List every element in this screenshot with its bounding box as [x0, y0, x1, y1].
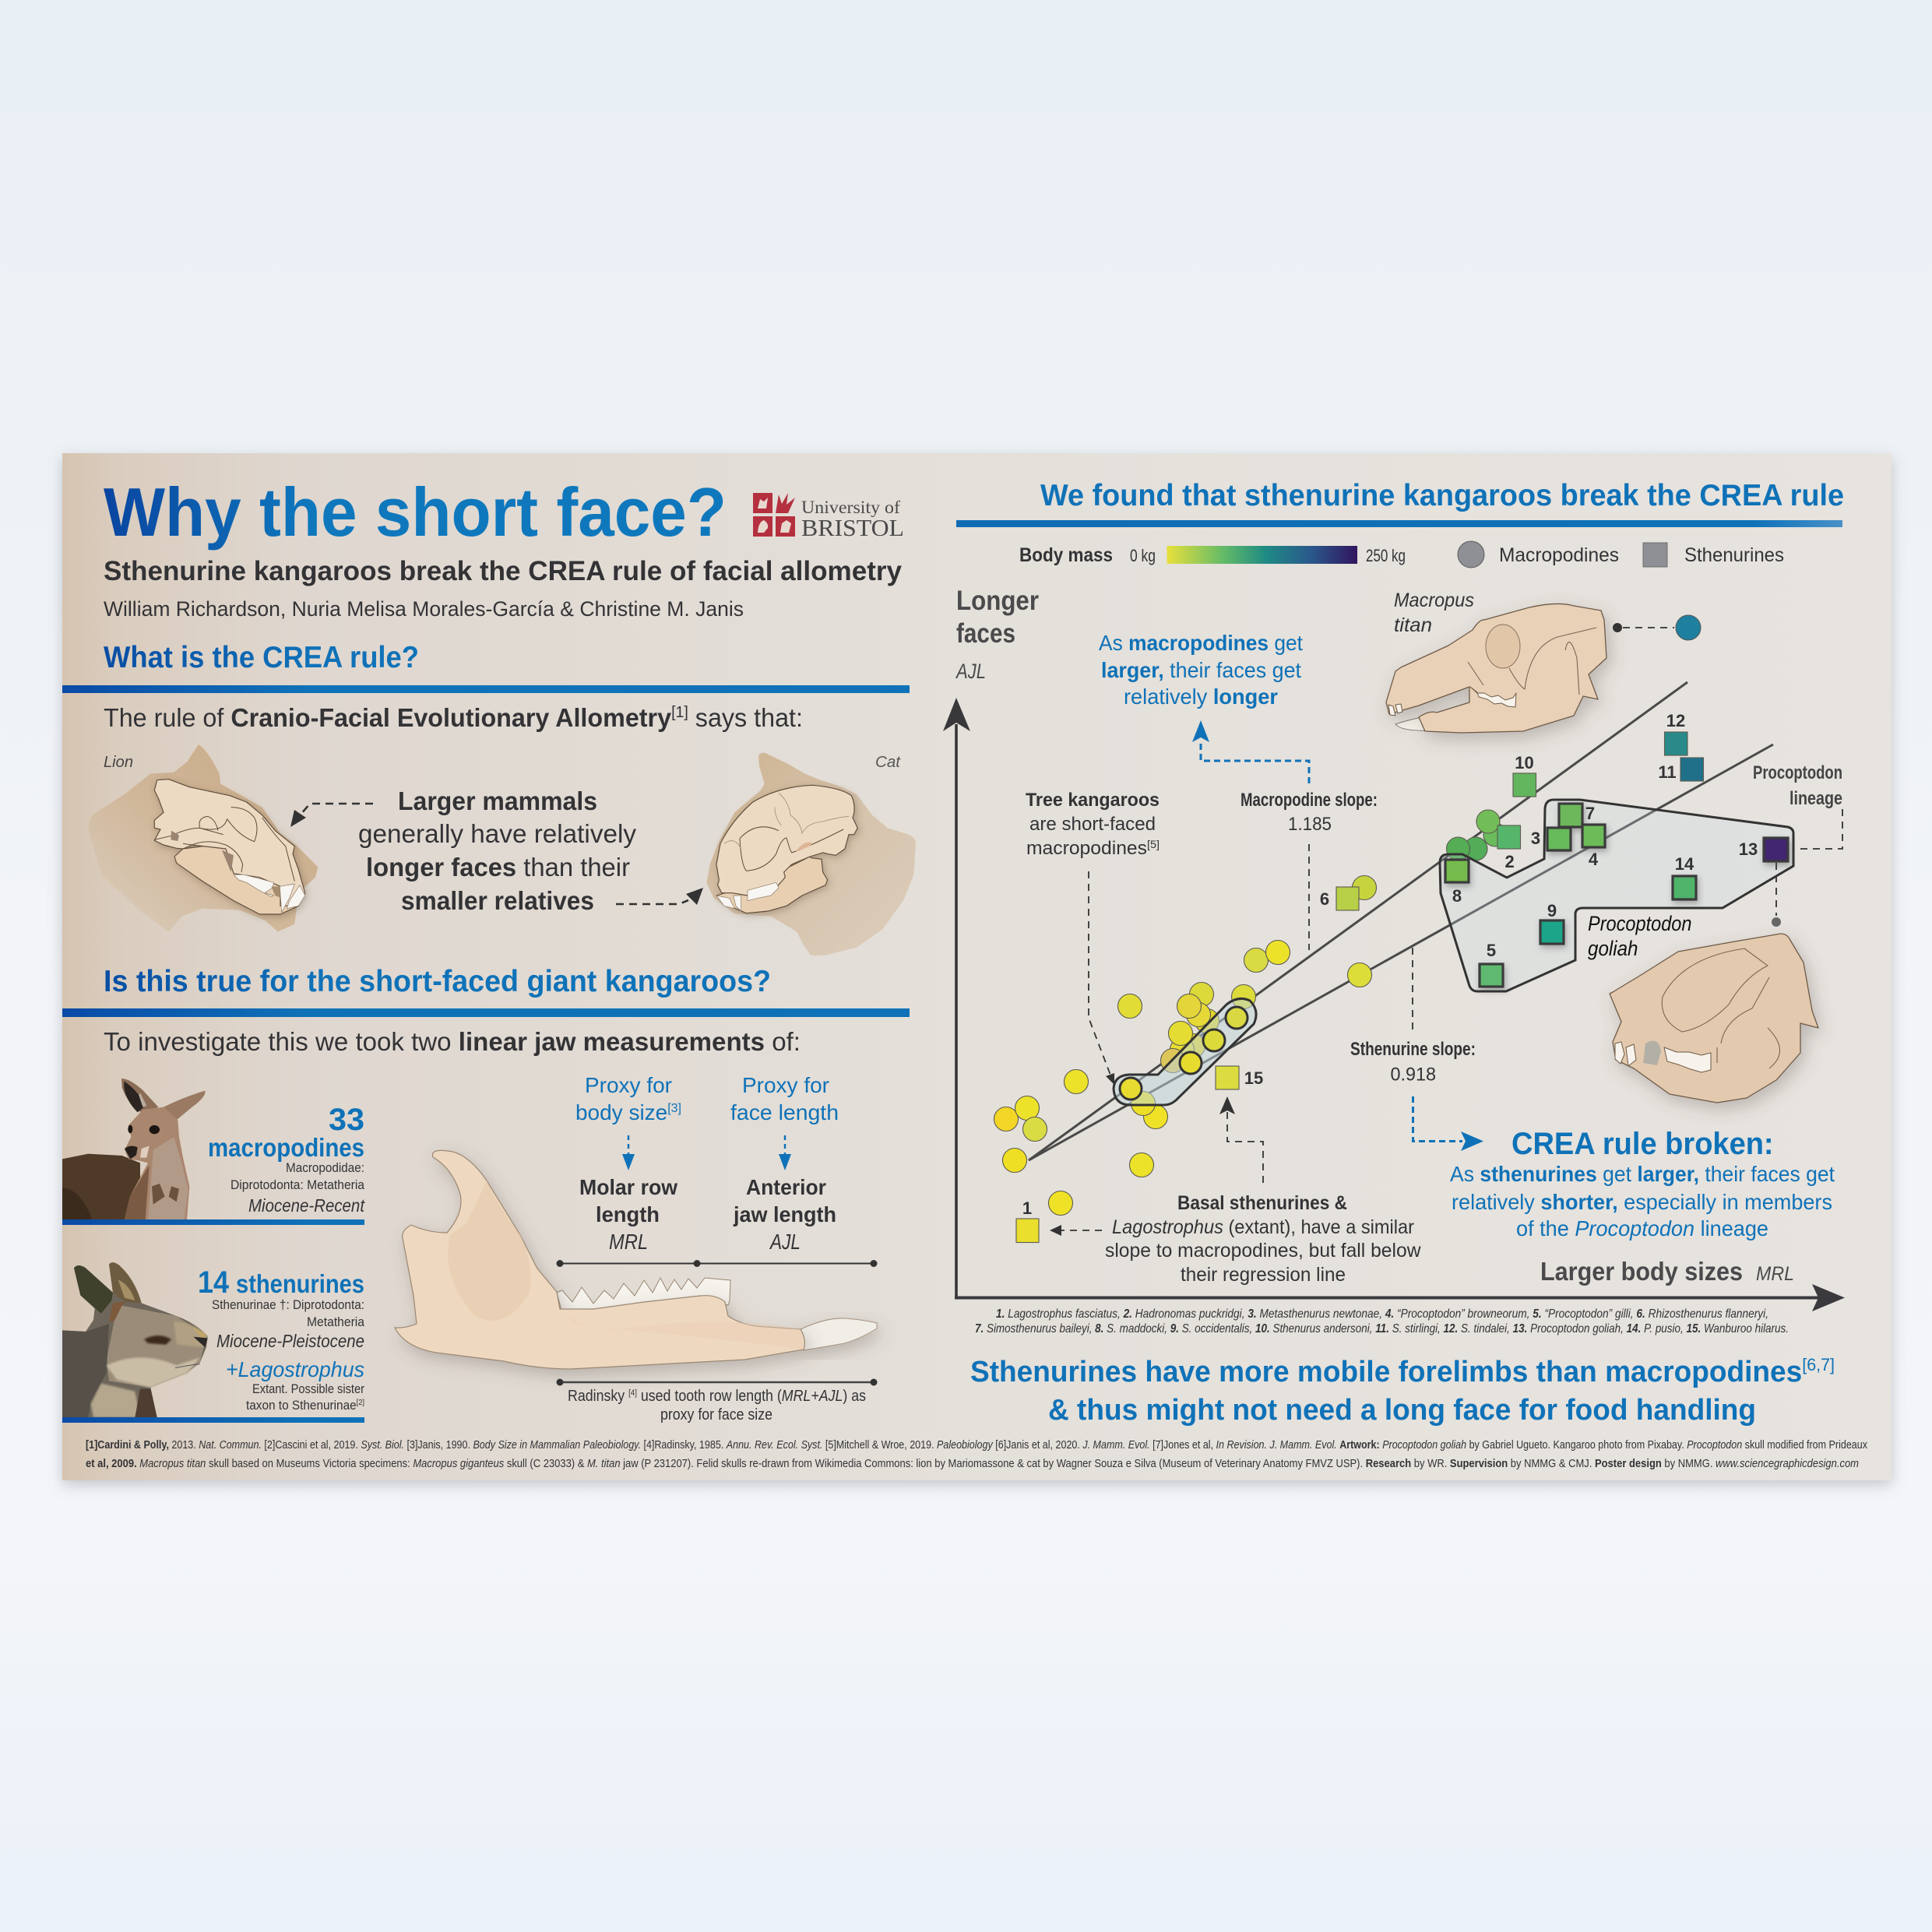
blue arrow up from macropodine slope: [1192, 720, 1309, 783]
regression line: sthenurines: [1029, 744, 1773, 1160]
data point numbers: 10: [1515, 753, 1534, 772]
Radinsky note: proxy for face size: [660, 1406, 772, 1423]
data point numbers: 1: [1022, 1198, 1032, 1218]
Procoptodon goliah label: [1588, 912, 1691, 960]
CREA rule broken statement: CREA rule broken:: [1511, 1127, 1774, 1161]
y axis arrow: [943, 698, 970, 1299]
CREA rule broken statement: [1450, 1127, 1835, 1240]
data point numbers: 2: [1504, 852, 1515, 871]
Radinsky note: Radinsky: [568, 1388, 632, 1405]
Sthenurine slope label: [1350, 948, 1476, 1086]
data point numbers: 5: [1487, 941, 1496, 960]
references and credits: [86, 1439, 1868, 1470]
blue arrow to CREA rule broken: [1413, 1096, 1483, 1151]
connector: Macropus titan point: [1613, 615, 1701, 640]
conclusion statement: & thus might not need a long face for food handling: [1048, 1394, 1756, 1427]
macropodine trend statement: [1099, 631, 1303, 709]
sthenurine stats: [2]: [357, 1399, 364, 1407]
sthenurine data points: [1016, 732, 1788, 1243]
proxy column: AJL: AJL: [769, 1230, 801, 1254]
x axis arrow: [955, 1284, 1845, 1311]
Macropodine slope label: [1240, 790, 1378, 950]
section bar: [62, 685, 910, 693]
data point numbers: 14: [1675, 854, 1694, 874]
Tree kangaroos note: macropodines: [1026, 838, 1144, 859]
proxy column: AJL: Anterior: [746, 1175, 826, 1199]
data point numbers: 11: [1658, 762, 1677, 782]
proxy column: MRL: body size: [575, 1100, 667, 1124]
sthenurine stats: sthenurines: [236, 1269, 364, 1298]
references and credits: et al, 2009. Macropus titan skull based on Museums Victoria specimens: Macropus giganteus skull (C 23033) & M. titan jaw (P 231207). Felid skulls re-drawn from Wikimedia Commons: lion by Mariomassone & cat by Wagner Souza e Silva (Museum of Veterinary Anatomy FMVZ USP). Research by WR. Supervision by NMMG & CMJ. Poster design by NMMG. www.sciencegraphicdesign.com: [86, 1458, 1859, 1470]
species key: [975, 1307, 1789, 1336]
x axis label: Larger body sizes: [1540, 1257, 1743, 1286]
logo: University of Bristol: BRISTOL: [801, 514, 904, 541]
sthenurine lineage outline: [1440, 800, 1793, 991]
Procoptodon goliah label: Procoptodon: [1588, 912, 1691, 935]
proxy column: MRL: length: [596, 1202, 660, 1226]
y axis label: Longer: [956, 586, 1039, 616]
logo: University of Bristol: [753, 493, 904, 541]
sthenurine kangaroo picture: [62, 1262, 208, 1417]
macropodine data points: [994, 810, 1507, 1215]
cat label: Cat: [875, 754, 901, 771]
poster background panel: [62, 453, 1892, 1480]
regression line: macropodines: [1029, 682, 1687, 1160]
Tree kangaroos note: [1026, 790, 1160, 859]
conclusion statement: Sthenurines have more mobile forelimbs than macropodines: [970, 1356, 1824, 1388]
sthenurine stats: Miocene-Pleistocene: [216, 1331, 364, 1351]
macropodine trend statement: larger, their faces get: [1101, 658, 1301, 682]
illustration: lion head and skull: [88, 744, 318, 932]
arrow to point 1: [1050, 1225, 1102, 1236]
macropodine stats: Miocene-Recent: [248, 1195, 365, 1216]
references and credits: [1]Cardini & Polly, 2013. Nat. Commun. [2]Cascini et al, 2019. Syst. Biol. [3]Janis, 1990. Body Size in Mammalian Paleobiology. [4]Radinsky, 1985. Annu. Rev. Ecol. Syst. [5]Mitchell & Wroe, 2019. Paleobiology [6]Janis et al, 2020. J. Mamm. Evol. [7]Jones et al, In Revision. J. Mamm. Evol. Artwork: Procoptodon goliah by Gabriel Ugueto. Kangaroo photo from Pixabay. Procoptodon skull modified from Prideaux: [86, 1439, 1868, 1452]
proxy column: AJL: [730, 1073, 839, 1254]
arrow to tree kangaroos: [1089, 871, 1114, 1085]
section bar: [62, 1008, 910, 1017]
right heading: We found that sthenurine kangaroos break the CREA rule: [1040, 479, 1844, 512]
macropodine stats: 33: [329, 1103, 364, 1137]
title: Why the short face?: [104, 473, 727, 551]
Macropus titan skull: Macropus: [1394, 589, 1474, 611]
y axis label: [955, 586, 1039, 683]
measure line: MRL and AJL: [556, 1260, 877, 1267]
proxy column: MRL: Proxy for: [585, 1073, 672, 1097]
macropodine trend statement: As macropodines get: [1099, 631, 1303, 655]
CREA rule broken statement: As sthenurines get larger, their faces get: [1450, 1162, 1835, 1186]
Procoptodon lineage label: Procoptodon: [1753, 762, 1842, 783]
illustration: cat head and skull: [706, 753, 916, 955]
data point numbers: [1022, 711, 1758, 1218]
data point numbers: 4: [1589, 850, 1599, 869]
conclusion statement: [970, 1355, 1835, 1427]
legend: Body mass: [1019, 544, 1113, 566]
Procoptodon lineage label: lineage: [1789, 788, 1842, 809]
macropodine stats: Macropodidae:: [286, 1161, 364, 1175]
sthenurine stats: Sthenurinae †: Diprotodonta:: [212, 1298, 364, 1312]
Procoptodon goliah label: goliah: [1588, 937, 1638, 960]
macropodine underline: [62, 1219, 364, 1225]
Macropus titan skull: titan: [1394, 614, 1432, 636]
macropodine kangaroo picture: [62, 1079, 205, 1219]
data point numbers: 3: [1531, 829, 1540, 848]
central text: larger mammals: [358, 787, 636, 915]
central text: larger mammals: longer faces than their: [366, 853, 630, 882]
Macropodine slope label: Macropodine slope:: [1240, 790, 1378, 811]
proxy column: AJL: jaw length: [733, 1202, 836, 1226]
Procoptodon lineage label: [1753, 762, 1842, 849]
basal sthenurines note: their regression line: [1181, 1264, 1346, 1286]
Tree kangaroos note: Tree kangaroos: [1026, 790, 1160, 811]
sthenurine stats: Metatheria: [307, 1315, 365, 1329]
tree kangaroo data points: [1120, 1007, 1248, 1100]
proxy column: AJL: face length: [730, 1100, 839, 1124]
macropodine stats: macropodines: [208, 1133, 364, 1162]
legend: [1019, 541, 1784, 568]
data point numbers: 15: [1244, 1068, 1263, 1088]
CREA rule broken statement: of the Procoptodon lineage: [1516, 1216, 1768, 1240]
Macropus titan skull: [1386, 589, 1606, 733]
y axis label: AJL: [955, 660, 986, 683]
data point numbers: 13: [1739, 839, 1758, 859]
Tree kangaroos note: are short-faced: [1029, 814, 1156, 835]
investigate sentence: To investigate this we took two linear jaw measurements of:: [104, 1027, 801, 1056]
rule sentence: The rule of Cranio-Facial Evolutionary Allometry: [104, 703, 681, 732]
species key: 1. Lagostrophus fasciatus, 2. Hadronomas puckridgi, 3. Metasthenurus newtonae, 4. “Procoptodon” browneorum, 5. “Procoptodon” gilli, 6. Rhizosthenurus flanneryi,: [996, 1307, 1768, 1321]
basal sthenurines note: [1105, 1192, 1421, 1286]
proxy column: MRL: MRL: [609, 1230, 648, 1254]
Macropodine slope label: 1.185: [1288, 814, 1332, 835]
Radinsky note: used tooth row length (: [637, 1388, 782, 1405]
Tree kangaroos note: [5]: [1147, 838, 1160, 850]
legend: 0 kg: [1130, 546, 1156, 565]
sthenurine stats: Extant. Possible sister: [252, 1382, 364, 1396]
rule sentence: [1]: [671, 704, 688, 721]
proxy column: MRL: Molar row: [579, 1175, 677, 1199]
heading: what is the CREA rule: What is the CREA rule?: [104, 641, 419, 674]
legend: 250 kg: [1366, 546, 1406, 565]
data point numbers: 6: [1320, 889, 1329, 909]
subtitle: Sthenurine kangaroos break the CREA rule of facial allometry: [104, 556, 903, 586]
data point numbers: 9: [1547, 901, 1557, 920]
species key: 7. Simosthenurus baileyi, 8. S. maddocki, 9. S. occidentalis, 10. Sthenurus andersoni, 11. S. stirlingi, 12. S. tindalei, 13. Procoptodon goliah, 14. P. pusio, 15. Wanburoo hilarus.: [975, 1322, 1789, 1336]
basal sthenurines note: Basal sthenurines &: [1177, 1192, 1347, 1214]
sthenurine stats: taxon to Sthenurinae: [246, 1399, 364, 1413]
basal sthenurines note: Lagostrophus (extant), have a similar: [1112, 1216, 1414, 1238]
central text: larger mammals: generally have relatively: [358, 819, 636, 848]
macropodine stats: [208, 1103, 365, 1216]
sthenurine stats: +Lagostrophus: [226, 1357, 364, 1381]
proxy column: MRL: [575, 1073, 681, 1254]
basal sthenurines note: slope to macropodines, but fall below: [1105, 1240, 1421, 1262]
proxy column: AJL: Proxy for: [742, 1073, 829, 1097]
arrow to point 15: [1219, 1096, 1263, 1183]
Sthenurine slope label: Sthenurine slope:: [1350, 1039, 1476, 1060]
arrow to lion: [290, 804, 373, 827]
rule sentence: says that:: [688, 703, 803, 732]
authors: William Richardson, Nuria Melisa Morales-García & Christine M. Janis: [104, 597, 744, 621]
x axis label: MRL: [1756, 1263, 1794, 1285]
Sthenurine slope label: 0.918: [1391, 1064, 1436, 1086]
section bar: [956, 520, 1842, 527]
macropodine stats: Diprotodonta: Metatheria: [231, 1178, 365, 1192]
sthenurine stats: 14: [198, 1265, 230, 1300]
central text: larger mammals: Larger mammals: [398, 787, 597, 815]
legend: Macropodines: [1499, 544, 1619, 566]
logo: University of Bristol: University of: [801, 498, 900, 517]
legend: Sthenurines: [1684, 544, 1784, 566]
sthenurine stats: [198, 1265, 365, 1413]
Radinsky note: [568, 1388, 866, 1423]
lion label: Lion: [104, 754, 133, 771]
central text: larger mammals: smaller relatives: [401, 886, 594, 915]
Radinsky note: [4]: [628, 1388, 637, 1398]
connector: Procoptodon goliah: [1772, 863, 1781, 927]
conclusion statement: [6,7]: [1802, 1355, 1835, 1374]
proxy column: MRL: [3]: [667, 1102, 681, 1115]
heading: is this true: Is this true for the short-faced giant kangaroos?: [104, 965, 771, 998]
arrow to cat: [616, 888, 703, 905]
macropodine trend statement: relatively longer: [1124, 684, 1278, 709]
Radinsky note: MRL+AJL) as: [782, 1388, 869, 1405]
data point numbers: 8: [1452, 886, 1462, 906]
basal group outline: [1114, 998, 1256, 1105]
CREA rule broken statement: relatively shorter, especially in members: [1452, 1190, 1832, 1214]
data point numbers: 7: [1585, 804, 1595, 823]
data point numbers: 12: [1666, 711, 1685, 730]
illustration: kangaroo jaw: [395, 1150, 877, 1369]
y axis label: faces: [956, 618, 1015, 649]
measure line: tooth row: [556, 1378, 877, 1386]
sthenurine underline: [62, 1417, 364, 1423]
Procoptodon skull: [1610, 934, 1818, 1103]
